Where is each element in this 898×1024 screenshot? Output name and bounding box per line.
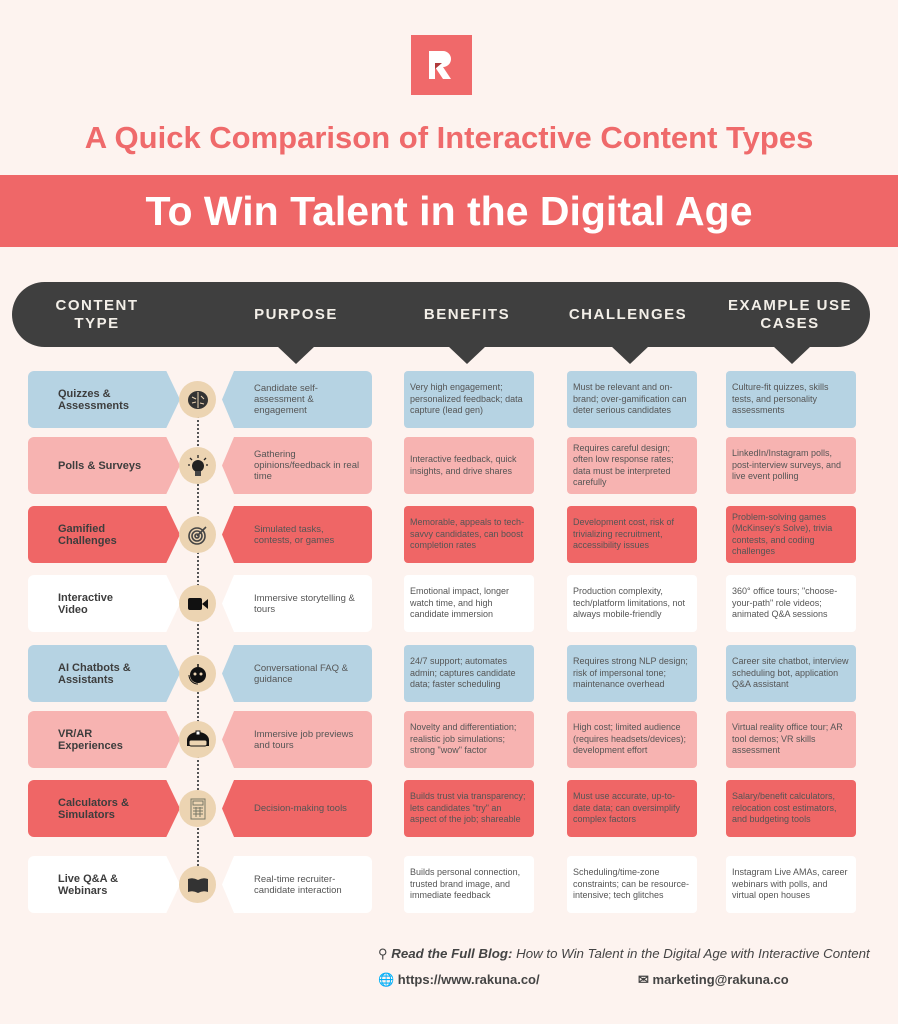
row 3: Development cost, risk of trivializing recruitment, accessibility issues <box>573 517 674 550</box>
row 6: Experiences <box>58 740 123 752</box>
row 5: Conversational FAQ & guidance <box>254 662 348 684</box>
row 1: Quizzes & <box>58 388 111 400</box>
row 8: Webinars <box>58 884 107 896</box>
header bar <box>12 282 870 347</box>
row 3: Gamified <box>58 522 105 534</box>
row 6: VR/AR <box>58 728 92 740</box>
row 3 <box>28 506 856 563</box>
row 4: Immersive storytelling & tours <box>254 592 355 614</box>
row 8: Live Q&A & <box>58 872 118 884</box>
row 2: Requires careful design; often low response rates; data must be interpreted carefully <box>573 442 674 487</box>
logo <box>411 35 472 95</box>
row 1: Must be relevant and on-brand; over-gamification can deter serious candidates <box>573 382 687 415</box>
banner <box>0 175 898 247</box>
row 4 <box>28 575 856 632</box>
header: content type <box>56 297 138 332</box>
header: benefits: BENEFITS <box>424 306 510 323</box>
row 7 <box>28 780 856 837</box>
header: examples: CASES <box>760 315 820 332</box>
row 3: Problem-solving games (McKinsey's Solve), trivia contests, and coding challenges <box>732 512 832 556</box>
row 5: AI Chatbots & <box>58 662 131 674</box>
row 5 <box>28 645 856 702</box>
row 6: Virtual reality office tour; AR tool demos; VR skills assessment <box>732 722 843 755</box>
row 6 <box>28 711 856 768</box>
row 2 <box>28 437 856 494</box>
row 6: Novelty and differentiation; realistic job simulations; strong "wow" factor <box>410 722 516 755</box>
row 5: 24/7 support; automates admin; captures candidate data; faster scheduling <box>410 656 516 689</box>
row 4: Emotional impact, longer watch time, and high candidate immersion <box>410 586 509 619</box>
row 4: Interactive <box>58 592 113 604</box>
row 8: Instagram Live AMAs, career webinars with polls, and virtual open houses <box>732 867 848 900</box>
banner: To Win Talent in the Digital Age <box>145 188 752 234</box>
row 7: Builds trust via transparency; lets candidates "try" an aspect of the job; shareable <box>410 791 526 824</box>
row 2: Interactive feedback, quick insights, and drive shares <box>410 454 517 476</box>
row 5: Requires strong NLP design; risk of impersonal tone; maintenance overhead <box>573 656 688 689</box>
row 2: Gathering opinions/feedback in real time <box>254 449 359 482</box>
row 4: Video <box>58 604 88 616</box>
header: content type: CONTENT <box>56 297 138 314</box>
row 6: Immersive job previews and tours <box>254 728 353 750</box>
row 4: 360° office tours; "choose-your-path" role videos; animated Q&A sessions <box>732 586 837 619</box>
row 2: Polls & Surveys <box>58 460 141 472</box>
row 1: Assessments <box>58 400 129 412</box>
row 3: Memorable, appeals to tech-savvy candidates, can boost completion rates <box>410 517 524 550</box>
row 4: Production complexity, tech/platform limitations, not always mobile-friendly <box>573 586 685 619</box>
header: examples <box>728 297 852 332</box>
row 7: Calculators & <box>58 796 129 808</box>
dotted connector <box>197 400 199 890</box>
row 8: Real-time recruiter-candidate interaction <box>254 874 342 896</box>
footer: email: ✉ marketing@rakuna.co <box>638 972 789 987</box>
row 7: Salary/benefit calculators, relocation cost estimators, and budgeting tools <box>732 791 837 824</box>
row 3: Challenges <box>58 534 117 546</box>
header: challenges: CHALLENGES <box>569 306 687 323</box>
row 1: Candidate self-assessment & engagement <box>254 383 318 416</box>
row 3: Simulated tasks, contests, or games <box>254 524 334 546</box>
header: content type: TYPE <box>74 315 120 332</box>
row 1: Very high engagement; personalized feedback; data capture (lead gen) <box>410 382 523 415</box>
row 8 <box>28 856 856 913</box>
header: examples: EXAMPLE USE <box>728 297 852 314</box>
row 5: Assistants <box>58 674 114 686</box>
row 7: Must use accurate, up-to-date data; can oversimplify complex factors <box>573 791 680 824</box>
row 2: LinkedIn/Instagram polls, post-interview surveys, and live event polling <box>732 448 841 481</box>
row 7: Simulators <box>58 808 115 820</box>
row 1 <box>28 371 856 428</box>
row 1: Culture-fit quizzes, skills tests, and personality assessments <box>732 382 829 415</box>
row 8: Scheduling/time-zone constraints; can be resource-intensive; tech glitches <box>573 867 689 900</box>
header: purpose: PURPOSE <box>254 306 338 323</box>
row 5: Career site chatbot, interview scheduling bot, application Q&A assistant <box>732 656 849 689</box>
footer: website: 🌐 https://www.rakuna.co/ <box>378 972 540 987</box>
title: A Quick Comparison of Interactive Content Types <box>85 120 813 155</box>
footer: blog link: ⚲ Read the Full Blog: How to Win Talent in the Digital Age with Interactive Content <box>378 946 870 961</box>
row 8: Builds personal connection, trusted brand image, and immediate feedback <box>410 867 520 900</box>
row 7: Decision-making tools <box>254 803 347 814</box>
row 6: High cost; limited audience (requires headsets/devices); development effort <box>573 722 686 755</box>
